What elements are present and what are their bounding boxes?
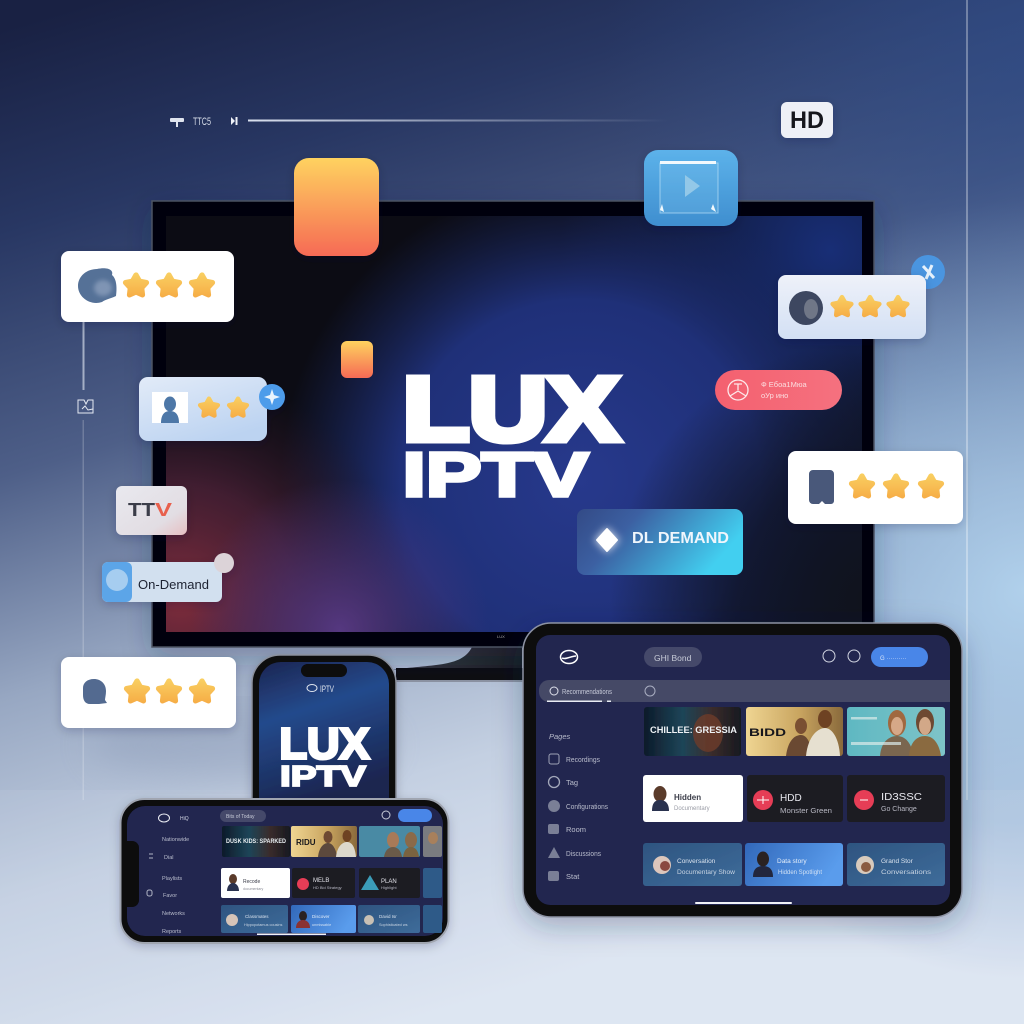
tablet	[523, 623, 962, 917]
logo: LUX IPTV	[402, 360, 619, 510]
landscape row 3: cards: David Isr	[379, 914, 397, 919]
landscape sidebar: Reports	[162, 929, 182, 935]
tablet sidebar: Discussions	[566, 849, 601, 858]
landscape top bar: HiQ	[180, 816, 189, 822]
card: blue three: Grand Stor	[881, 858, 914, 865]
avatar	[83, 679, 107, 704]
badge: TTV: TT	[128, 500, 155, 520]
phone header label: IPTV	[320, 684, 334, 694]
avatar shape	[809, 470, 834, 504]
callout: DL DEMAND: DL DEMAND	[632, 530, 729, 547]
phone header label	[307, 684, 334, 694]
logo	[560, 650, 578, 664]
chip: On-Demand	[102, 553, 234, 602]
media progress bar	[170, 116, 668, 128]
phone logo: LUX	[280, 720, 370, 768]
tablet row 3: cards	[643, 843, 945, 886]
landscape row 2: cards: HD Bid Strategy	[313, 885, 342, 890]
icon: small map marker	[78, 400, 93, 413]
landscape sidebar: Nationwide	[162, 837, 189, 843]
badge: HD: HD	[790, 107, 824, 134]
landscape row 3: cards: unmissable	[312, 923, 331, 927]
callout: DL DEMAND	[577, 509, 743, 575]
phone landscape	[120, 799, 448, 943]
tablet sidebar: Pages	[549, 732, 571, 741]
tablet top bar: G ··········	[880, 656, 906, 662]
card: ID3SSC	[847, 775, 945, 822]
card: white profile	[643, 775, 743, 822]
landscape row 3: cards	[221, 905, 442, 933]
tablet nav bar: Recommendations	[562, 689, 612, 696]
rating card: top left	[61, 251, 234, 322]
action button	[871, 647, 928, 667]
phone logo	[280, 720, 370, 793]
badge: sparkle	[259, 384, 285, 410]
badge: TTV	[116, 486, 187, 535]
card: ID3SSC: Go Change	[881, 806, 917, 813]
card: blue three	[847, 843, 945, 886]
progress label: TTC5	[193, 116, 211, 128]
tablet nav bar	[539, 680, 950, 702]
icon: glowing diamond	[594, 527, 620, 553]
icons	[823, 650, 860, 662]
landscape row 3: cards: Sophisticated ws	[379, 923, 408, 927]
thumbnail: gold title	[746, 707, 843, 756]
landscape row 2: cards: Recode	[243, 879, 260, 885]
avatar	[78, 268, 117, 303]
tablet sidebar: Configurations	[566, 802, 608, 811]
landscape sidebar: Playlists	[162, 876, 182, 882]
rating card: bottom left	[61, 657, 236, 728]
tablet sidebar: Room	[566, 825, 586, 834]
tv stand	[392, 647, 526, 682]
landscape top bar	[158, 809, 432, 822]
icon: gauge	[728, 380, 748, 400]
tablet top bar: GHI Bond	[654, 653, 692, 663]
landscape row 3: cards: Discover	[312, 914, 330, 919]
landscape row 2: cards: PLAN	[381, 879, 397, 885]
badge: TTV: V	[155, 500, 172, 520]
card: blue one: Documentary Show	[677, 869, 735, 876]
card: white profile: Hidden	[674, 793, 701, 802]
avatar	[789, 291, 823, 325]
tv bezel	[152, 201, 874, 647]
landscape sidebar: Networks	[162, 911, 185, 917]
landscape row 2: cards: documentary	[243, 887, 263, 891]
landscape row 3: cards: Classmates	[245, 914, 269, 919]
decorative line right	[966, 0, 968, 800]
thumbnail: teal title	[847, 707, 945, 756]
tv screen	[166, 216, 862, 632]
card: ID3SSC: ID3SSC	[881, 792, 922, 803]
avatar tile	[152, 392, 188, 423]
chip: On-Demand: On-Demand	[138, 577, 209, 592]
badge: HD	[781, 102, 833, 138]
dynamic island	[301, 664, 347, 677]
card: bright blue: Hidden Spotlight	[778, 870, 822, 876]
icon: remote	[170, 118, 184, 127]
landscape sidebar: Favor	[163, 893, 177, 899]
landscape screen	[127, 806, 443, 936]
landscape row 1: thumbnails: RIDU	[296, 838, 316, 847]
icon: skip	[231, 117, 238, 125]
logo: LUX IPTV: LUX	[403, 360, 619, 460]
phone logo: IPTV	[280, 761, 367, 793]
logo: LUX IPTV: IPTV	[402, 441, 588, 510]
tablet screen	[536, 635, 950, 905]
rating card: top right	[778, 255, 945, 339]
thumbnail: dark title: CHILLEE: GRESSIA	[650, 725, 738, 735]
progress line	[248, 120, 668, 122]
landscape home bar	[257, 934, 326, 935]
tablet home bar	[695, 902, 792, 904]
brand tag: LUX	[497, 634, 505, 639]
landscape row 2: cards: Highlight	[381, 885, 397, 890]
card: blue three: Conversations	[881, 869, 932, 876]
tablet top bar	[560, 647, 928, 667]
landscape row 1: thumbnails: DUSK KIDS: SPARKED	[226, 839, 287, 845]
card: blue one: Conversation	[677, 858, 716, 865]
landscape row 1: thumbnails	[222, 826, 442, 857]
search pill	[644, 647, 702, 667]
card: blue one	[643, 843, 742, 886]
tablet sidebar: Stat	[566, 872, 580, 881]
card: HDD: Monster Green	[780, 808, 832, 815]
tablet row 2: cards	[643, 775, 945, 822]
phone portrait	[252, 655, 396, 805]
thumbnail: dark title	[644, 707, 741, 756]
pill: red status	[715, 370, 842, 410]
card: white profile: Documentary	[674, 806, 710, 812]
tablet sidebar: Recordings	[566, 755, 600, 764]
television	[152, 201, 874, 682]
tile: orange small	[341, 341, 373, 378]
badge: plane	[911, 255, 945, 289]
rating card: blue left	[139, 377, 285, 441]
tile: orange large	[294, 158, 379, 256]
tablet sidebar	[548, 732, 608, 881]
rating card: right white	[788, 451, 963, 524]
tablet sidebar: Tag	[566, 778, 578, 787]
avatar person	[161, 396, 179, 423]
pill: red status: Ф Ебоа1Мюа	[761, 380, 807, 389]
landscape row 2: cards	[221, 868, 442, 898]
decorative line left	[82, 320, 84, 800]
notch	[127, 841, 139, 907]
card: bright blue: Data story	[777, 858, 807, 865]
card: bright blue	[745, 843, 843, 886]
landscape sidebar	[147, 837, 189, 935]
card: HDD: HDD	[780, 793, 802, 804]
landscape row 2: cards: MELB	[313, 878, 329, 884]
pill: red status: оУр ино	[761, 391, 788, 400]
landscape sidebar: Dial	[164, 855, 173, 861]
tile: blue video	[644, 150, 738, 226]
phone screen	[259, 662, 389, 805]
thumbnail: gold title: BIDD	[749, 727, 786, 739]
landscape row 3: cards: Hippopotamus cousins	[244, 923, 283, 927]
tablet row 1: thumbnails	[644, 707, 945, 756]
card: HDD	[747, 775, 843, 822]
landscape top bar: Bits of Today	[226, 814, 255, 820]
